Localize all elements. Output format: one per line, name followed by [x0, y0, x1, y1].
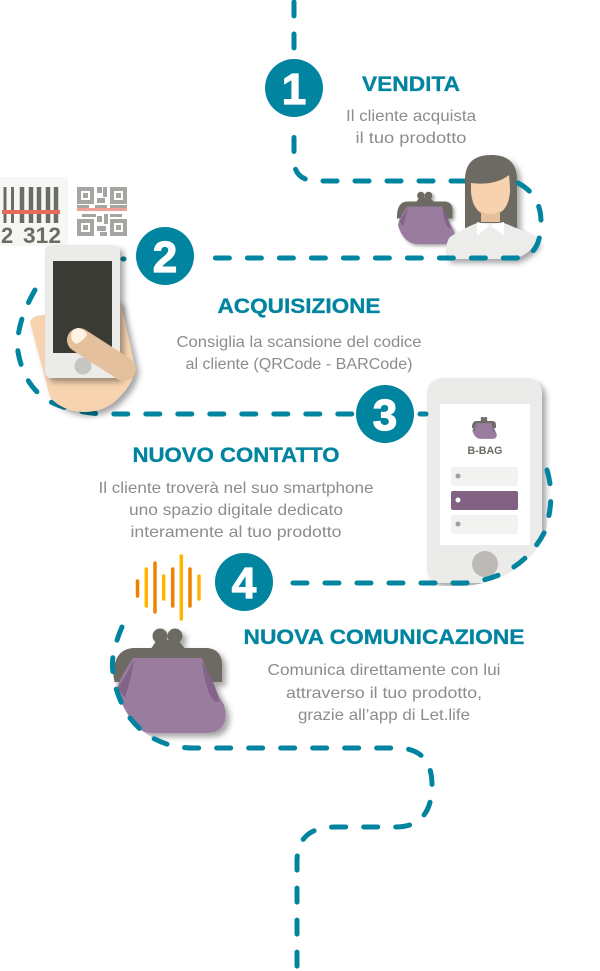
icon: small purse [397, 192, 454, 244]
dashed route: stub behind the phone [123, 256, 124, 262]
icon: barcode: 2 [1, 223, 13, 248]
text: nuovo contatto description: interamente al tuo prodotto [130, 524, 342, 541]
hand [30, 300, 135, 412]
step 1 badge [265, 59, 323, 117]
text: acquisizione description: al cliente (QRCode - BARCode) [186, 356, 412, 373]
heading: vendita: VENDITA [362, 73, 460, 96]
phone screen [440, 404, 530, 545]
phone corner cut-out along the route [425, 515, 560, 600]
text: nuova comunicazione description: attraverso il tuo prodotto, [286, 685, 482, 702]
icon: QR code [77, 187, 127, 236]
text: nuovo contatto description [98, 480, 374, 541]
B-BAG label: B-BAG [468, 445, 502, 457]
text: vendita description: Il cliente acquista [346, 108, 476, 125]
text: acquisizione description [176, 334, 422, 373]
icon: smartphone with B-BAG app [427, 378, 542, 583]
text: nuova comunicazione description: grazie all’app di Let.life [298, 707, 470, 724]
dashed route: top to step 1 [292, 2, 296, 55]
icon: large purse [113, 628, 226, 733]
text: nuova comunicazione description [268, 662, 500, 724]
dashed route: around the hand to step 3 [18, 290, 356, 414]
heading: acquisizione: ACQUISIZIONE [218, 295, 380, 318]
icon: hand holding smartphone [30, 245, 135, 412]
purse corner cut-out along the route [100, 672, 170, 760]
step 3 badge [356, 385, 414, 443]
dashed route: step 1 towards the woman [294, 120, 465, 181]
step 4 badge: 4 [232, 559, 257, 608]
icon: woman with purse [294, 120, 536, 259]
text: nuovo contatto description: Il cliente troverà nel suo smartphone [98, 480, 374, 497]
phone home button [472, 551, 498, 577]
icon: sound wave [138, 556, 199, 619]
step 1 badge: 1 [282, 65, 306, 114]
step 4 badge [215, 553, 273, 611]
heading: nuovo contatto: NUOVO CONTATTO [132, 444, 340, 467]
icon: barcode: 312 [23, 223, 61, 248]
text: vendita description: il tuo prodotto [356, 130, 467, 147]
phone [45, 245, 120, 378]
small purse [472, 417, 497, 439]
finger [79, 340, 124, 369]
menu items [451, 467, 518, 534]
text: acquisizione description: Consiglia la scansione del codice [176, 334, 422, 351]
woman figure [446, 155, 536, 259]
text: vendita description [346, 108, 476, 147]
dashed route: stub after step 3 [420, 412, 426, 416]
text: nuova comunicazione description: Comunica direttamente con lui [268, 662, 500, 679]
text: nuovo contatto description: uno spazio digitale dedicato [129, 502, 343, 519]
step 2 badge: 2 [153, 233, 177, 282]
heading: nuova comunicazione: NUOVA COMUNICAZIONE [244, 626, 524, 649]
dashed route: around the woman to step 2 [205, 183, 541, 258]
icon: barcode [0, 177, 68, 248]
phone body [427, 378, 542, 583]
dashed route: step 4 to bottom [112, 627, 432, 970]
dashed route: around the phone to step 4 [287, 470, 551, 583]
step 3 badge: 3 [373, 391, 397, 440]
step 2 badge [136, 227, 194, 285]
